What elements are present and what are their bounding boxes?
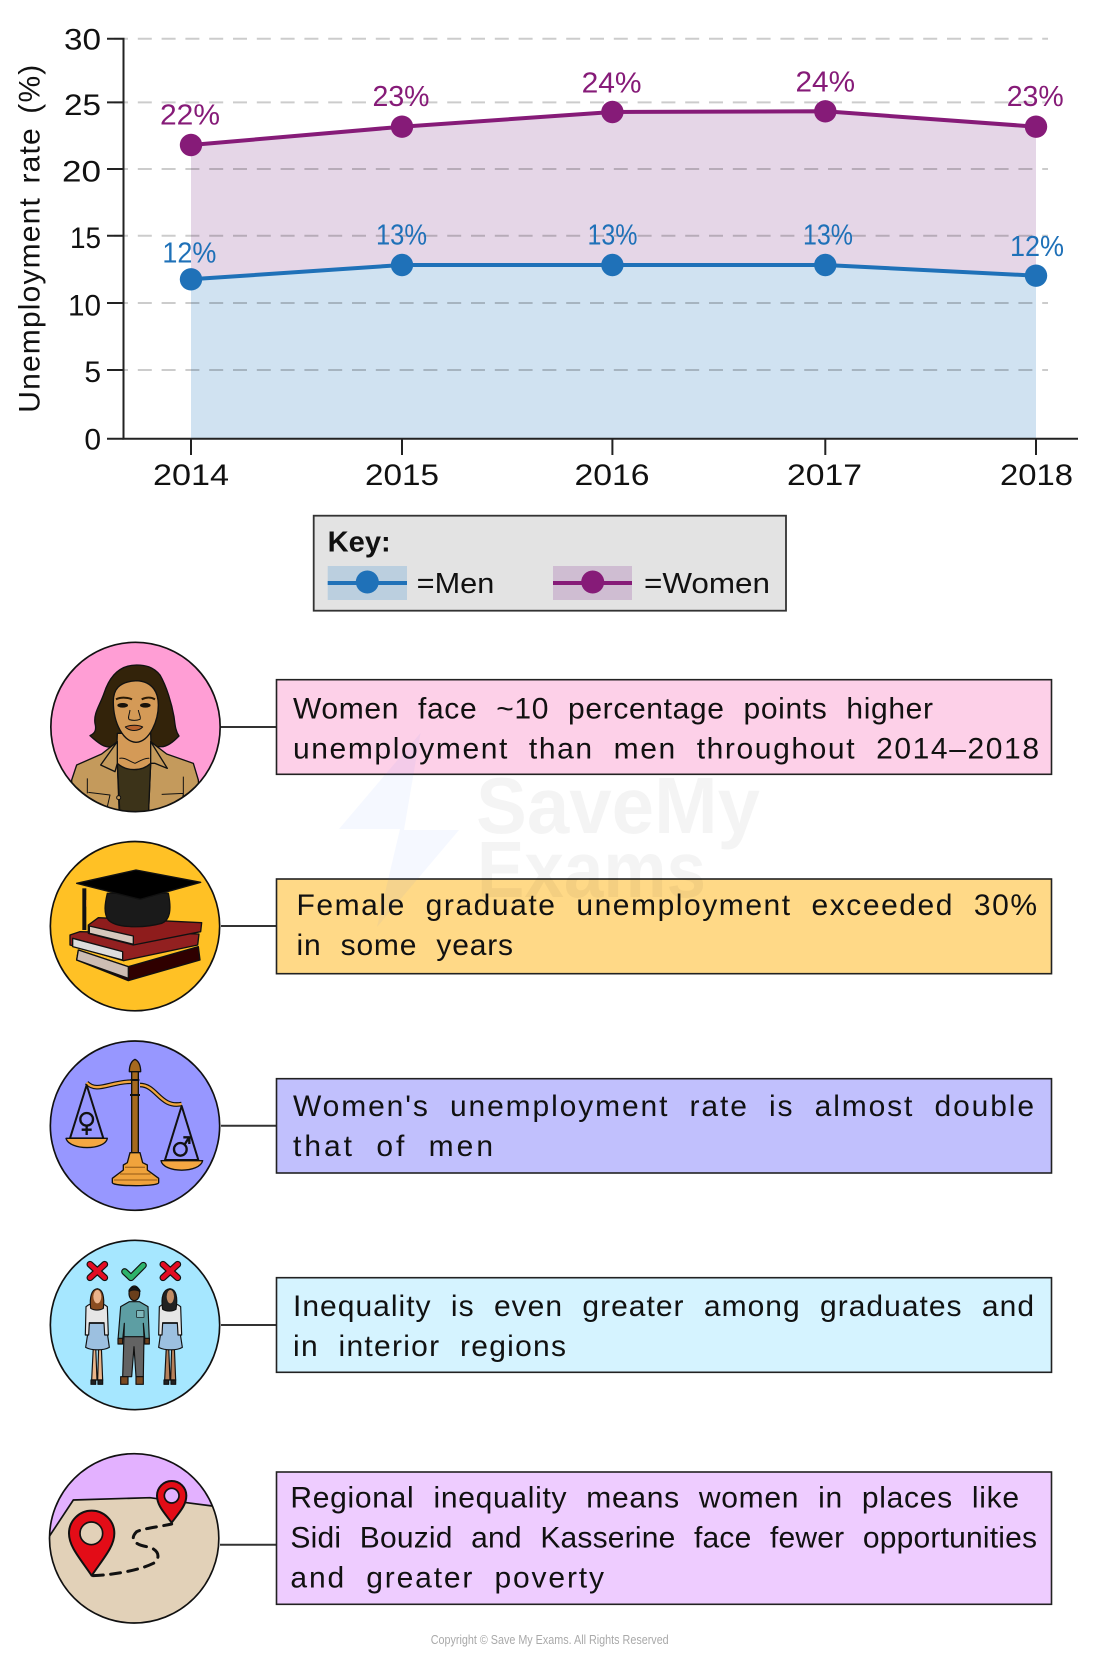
x axis labels: 2018 (1000, 459, 1073, 492)
y axis tick labels (62, 24, 101, 456)
men value labels: 13% (376, 220, 427, 252)
x axis labels: 2016 (574, 459, 650, 492)
text panel: double (276, 1079, 1052, 1173)
men value labels: 13% (803, 220, 853, 252)
men value labels: 13% (588, 220, 638, 252)
watermark: SaveMy (476, 761, 760, 850)
women value labels: 24% (582, 68, 642, 100)
y axis tick labels: 5 (84, 356, 101, 389)
chart area: men (191, 265, 1036, 439)
legend swatch: women (553, 566, 632, 600)
icon: woman portrait (51, 642, 220, 817)
women value labels (160, 66, 1064, 132)
row 2: female graduate unemployment (50, 841, 1052, 1011)
chart area: women (191, 111, 1036, 439)
women value labels: 23% (372, 81, 430, 113)
text panel: regional: Sidi Bouzid and Kasserine face fewer opportunities (290, 1522, 1037, 1555)
y axis tick labels: 0 (84, 424, 101, 456)
x axis labels: 2017 (787, 459, 862, 492)
text panel: double: Women's unemployment rate is almost double (293, 1090, 1034, 1123)
icon: map with route and pins (48, 1452, 220, 1624)
marks: cross, tick, cross (90, 1264, 178, 1278)
women series line and markers (180, 100, 1047, 156)
x axis labels: 2015 (365, 459, 439, 492)
women value labels: 23% (1007, 81, 1064, 113)
x axis labels (153, 459, 1073, 492)
legend label: men: =Men (417, 568, 494, 600)
icon: balance scales with gender symbols (50, 1041, 220, 1210)
legend heading: Key: (328, 527, 391, 559)
watermark (339, 733, 760, 927)
women value labels: 22% (160, 100, 220, 132)
men value labels: 12% (162, 238, 216, 270)
person: right woman (159, 1289, 182, 1384)
text panel: regional: and greater poverty (290, 1562, 604, 1595)
y axis tick labels: 25 (64, 89, 101, 122)
men value labels (162, 220, 1064, 270)
legend label: women: =Women (644, 568, 770, 600)
row 1: women face higher unemployment (51, 642, 1051, 817)
axes (107, 39, 1078, 455)
text panel: inequality (276, 1278, 1052, 1372)
text panel: double: that of men (293, 1130, 493, 1163)
text panel: graduates (276, 879, 1052, 974)
icon: graduation cap on books (50, 841, 220, 1011)
icon: three people with selection marks (50, 1240, 220, 1410)
watermark: Exams (477, 825, 706, 914)
text panel: regional (276, 1472, 1052, 1604)
text panel: women (276, 680, 1052, 774)
y axis title: Unemployment rate (%) (14, 65, 47, 413)
row 4: inequality among graduates (50, 1240, 1052, 1410)
person: man (118, 1286, 149, 1384)
y axis tick labels: 15 (70, 222, 101, 255)
legend key (314, 516, 786, 611)
women value labels: 24% (796, 66, 855, 98)
row 3: almost double (50, 1041, 1052, 1210)
row 5: regional inequality (48, 1452, 1052, 1624)
person: left woman (85, 1289, 109, 1384)
men series line and markers (180, 254, 1047, 290)
copyright: Copyright © Save My Exams. All Rights Reserved (431, 1633, 669, 1647)
y axis tick labels: 20 (62, 156, 101, 188)
y axis tick labels: 10 (68, 290, 101, 322)
text panel: graduates: in some years (296, 929, 513, 962)
text panel: inequality: Inequality is even greater among graduates and (293, 1290, 1034, 1323)
text panel: regional: Regional inequality means women in places like (290, 1482, 1019, 1515)
x axis labels: 2014 (153, 459, 229, 492)
line chart: unemployment rate by gender (14, 24, 1078, 492)
text panel: inequality: in interior regions (293, 1330, 566, 1363)
y axis tick labels: 30 (64, 24, 101, 56)
text panel: women: Women face ~10 percentage points higher (293, 692, 933, 725)
legend swatch: men (328, 566, 407, 600)
text panel: women: unemployment than men throughout 2014–2018 (293, 732, 1039, 765)
text panel: graduates: Female graduate unemployment exceeded 30% (296, 889, 1037, 922)
men value labels: 12% (1010, 231, 1064, 263)
